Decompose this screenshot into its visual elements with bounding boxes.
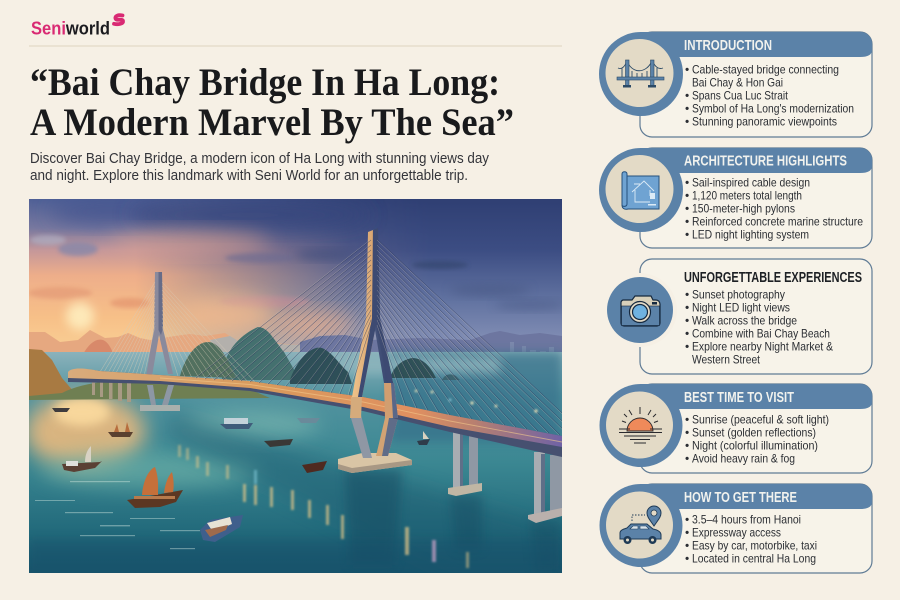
bullet list: • [685,176,689,190]
bullet list: • [685,102,689,116]
heading: INTRODUCTION [684,38,772,54]
bullet list: Night (colorful illumination) [692,438,818,452]
bullet list [685,412,829,465]
bullet list: Easy by car, motorbike, taxi [692,538,817,552]
small junk [108,422,133,437]
bullet list: Western Street [692,352,761,366]
heading: ARCHITECTURE HIGHLIGHTS [684,154,847,170]
title: A Modern Marvel By The Sea” [30,101,514,144]
bullet list: • [685,552,689,566]
icon: sunset [606,392,673,458]
distant white boat [297,418,320,423]
bullet list: 150-meter-high pylons [692,202,795,216]
bullet list: • [685,451,689,465]
main pylon tower [350,228,398,418]
logo: Seniworld: Seniworld [31,18,110,38]
junk boat large [127,467,183,508]
light reflections [178,445,469,568]
bullet list: • [685,438,689,452]
bullet list: • [685,114,689,128]
icon: camera [603,273,677,347]
bullet list: Explore nearby Night Market & [692,339,833,353]
bullet list: Sunrise (peaceful & soft light) [692,412,829,426]
bullet list: Sunset photography [692,287,785,301]
bullet list: Night LED light views [692,300,790,314]
ring and header band [599,148,872,232]
left pylon [140,272,180,411]
panel: introduction [599,32,872,137]
bullet list [685,512,817,566]
panel: best time to visit [600,384,872,473]
bullet list: Spans Cua Luc Strait [692,89,789,103]
bullet list: Sail-inspired cable design [692,176,810,190]
boats [52,408,430,542]
title: “Bai Chay Bridge In Ha Long: [30,61,500,104]
heading: BEST TIME TO VISIT [684,390,794,406]
small sailboat [417,431,430,445]
sky [29,199,562,345]
bullet list: • [685,313,689,327]
bullet list: • [685,538,689,552]
bullet list: 1,120 meters total length [692,189,802,203]
ring and header band [600,484,872,567]
panel: unforgettable experiences [603,259,872,374]
distant mountains [29,330,562,352]
first approach pier [448,432,482,496]
bullet list: • [685,89,689,103]
motor yacht [200,515,243,542]
bullet list: • [685,215,689,229]
deck lights [415,390,538,412]
header divider [29,46,562,47]
ring and header band [599,32,872,116]
bridge deck [68,368,562,457]
heading: HOW TO GET THERE [684,490,797,506]
second approach pier [528,452,562,523]
icon: blueprint [606,155,674,223]
bullet list: • [685,189,689,203]
illustration: Bai Chay Bridge at sunset [25,199,593,573]
intro paragraph [30,151,490,184]
bullet list: • [685,228,689,242]
bullet list: • [685,300,689,314]
bullet list: • [685,63,689,77]
bullet list: • [685,525,689,539]
bullet list: • [685,339,689,353]
bullet list [685,287,833,366]
bullet list: Bai Chay & Hon Gai [692,76,783,90]
bullet list: Sunset (golden reflections) [692,425,816,439]
intro paragraph: and night. Explore this landmark with Seni World for an unforgettable trip. [30,168,468,184]
icon: bridge [606,39,674,107]
small dark boat [52,408,70,412]
title [30,61,514,144]
panel: architecture highlights [599,148,872,248]
sail boat [62,446,102,472]
ring and header band [600,384,872,467]
icon: car and map pin [606,492,673,558]
bullet list: • [685,287,689,301]
bullet list: • [685,326,689,340]
bullet list [685,176,863,242]
bullet list: Reinforced concrete marine structure [692,215,863,229]
panel: how to get there [600,484,872,573]
dark boat [264,439,293,447]
bullet list: 3.5–4 hours from Hanoi [692,512,801,526]
white cruise boat [220,418,253,429]
limestone islands [180,327,460,384]
bullet list: Avoid heavy rain & fog [692,451,795,465]
bullet list: Located in central Ha Long [692,552,816,566]
bullet list: Walk across the bridge [692,313,797,327]
water [25,352,562,573]
bullet list: • [685,202,689,216]
bullet list: Expressway access [692,525,781,539]
main pylon cables [195,240,562,436]
main pylon lower legs and base [338,415,412,473]
bullet list [685,63,854,128]
bullet list: • [685,412,689,426]
bullet list: Symbol of Ha Long's modernization [692,102,854,116]
bullet list: • [685,425,689,439]
foreground cliff and shore [29,349,270,400]
bullet list: Combine with Bai Chay Beach [692,326,830,340]
red fishing boat [302,461,327,473]
city skyline [510,342,554,352]
bullet list: Cable-stayed bridge connecting [692,63,839,77]
left approach piers [92,382,131,402]
bullet list: Stunning panoramic viewpoints [692,114,837,128]
bullet list: • [685,512,689,526]
left pylon cables [100,282,255,382]
intro paragraph: Discover Bai Chay Bridge, a modern icon of Ha Long with stunning views day [30,151,490,167]
bullet list: LED night lighting system [692,228,809,242]
